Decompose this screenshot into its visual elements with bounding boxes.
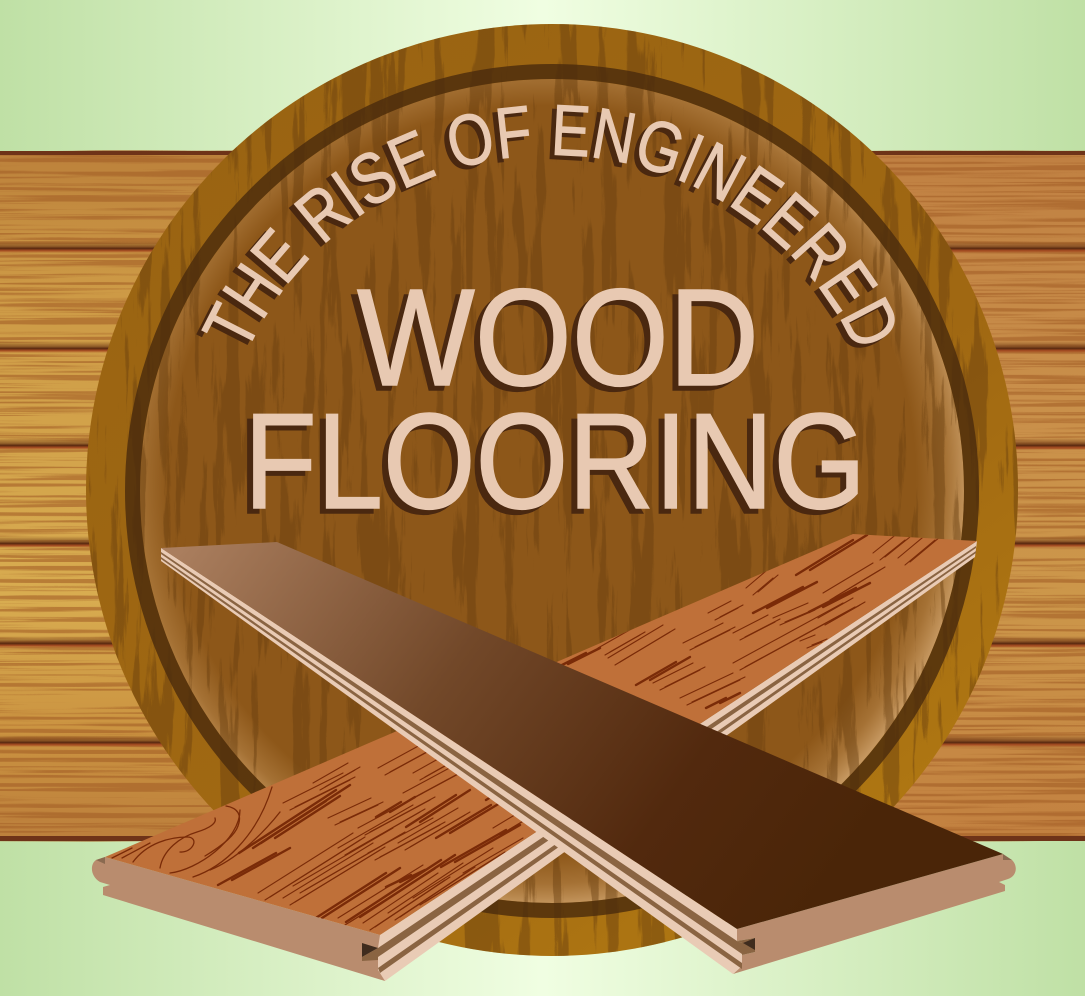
plank end face bbox=[733, 854, 1016, 974]
plank tongue shadow bbox=[96, 857, 105, 864]
plank layered side bbox=[161, 548, 742, 974]
background wood planks bbox=[0, 151, 1085, 841]
title: flooring: FLOORING bbox=[244, 385, 866, 537]
plank side stripes bbox=[378, 546, 976, 973]
title: the rise of engineered: THE RISE OF ENGINEERED bbox=[201, 104, 895, 344]
title: flooring: FLOORING bbox=[238, 390, 860, 542]
title: the rise of engineered: THE RISE OF ENGINEERED bbox=[196, 108, 888, 348]
plank end face bbox=[92, 857, 385, 981]
title: wood: WOOD bbox=[357, 261, 759, 415]
orange engineered plank bbox=[92, 533, 977, 981]
plank top face bbox=[105, 534, 977, 935]
plank side stripes bbox=[161, 552, 742, 969]
plank tongue shadow bbox=[1003, 854, 1012, 860]
plank top face bbox=[161, 542, 1003, 929]
dark engineered plank bbox=[161, 542, 1016, 974]
plank groove bbox=[362, 943, 378, 957]
plank layered side bbox=[378, 541, 977, 981]
title: wood: WOOD bbox=[351, 266, 753, 420]
plank wood grain bbox=[112, 533, 940, 930]
plank groove bbox=[737, 938, 755, 955]
